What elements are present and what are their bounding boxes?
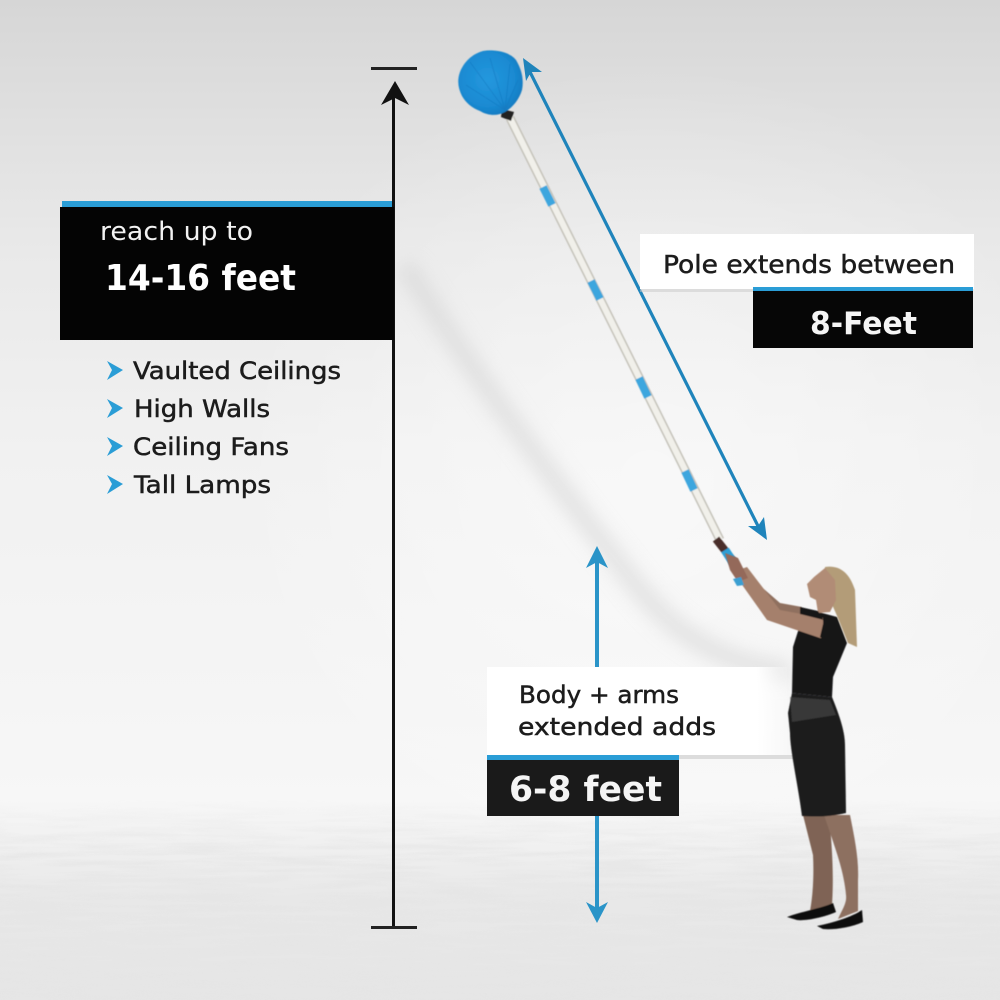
- front leg: [824, 815, 858, 919]
- text: extended adds: extended adds: [518, 713, 716, 741]
- hair: [824, 567, 857, 647]
- pole with duster head: [458, 50, 734, 564]
- back leg: [803, 815, 833, 911]
- figure: woman holding pole: [725, 553, 863, 929]
- pole handle: [716, 539, 734, 562]
- skirt: [788, 693, 846, 817]
- head: [807, 568, 836, 613]
- text: 8-Feet: 8-Feet: [810, 306, 917, 342]
- text: Tall Lamps: Tall Lamps: [133, 471, 271, 499]
- height measure line: black arrow with end caps: [371, 67, 417, 929]
- rear arm: [745, 570, 802, 618]
- text: Vaulted Ceilings: Vaulted Ceilings: [133, 357, 341, 385]
- icon: bullet 2: [107, 399, 123, 418]
- panel: reach up to 14-16 feet: [60, 201, 394, 340]
- hand: [725, 553, 748, 582]
- panel: body + arms: [487, 667, 794, 816]
- arrow: pole length: [523, 58, 767, 540]
- torso: [792, 607, 847, 697]
- text: reach up to: reach up to: [100, 217, 253, 247]
- icon: bullet 3: [107, 437, 123, 456]
- shoes: [787, 903, 836, 920]
- pole blue clips: [543, 187, 694, 490]
- text: Body + arms: Body + arms: [519, 681, 679, 709]
- text: High Walls: High Walls: [134, 395, 270, 423]
- front arm: [733, 567, 824, 638]
- panel: pole extends: [640, 234, 974, 348]
- text: Ceiling Fans: Ceiling Fans: [133, 433, 289, 461]
- text: 14-16 feet: 14-16 feet: [105, 258, 296, 299]
- pole shaft: [510, 118, 720, 540]
- text: Pole extends between: Pole extends between: [663, 250, 955, 279]
- icon: bullet 4: [107, 475, 123, 494]
- sleeve: [800, 607, 826, 640]
- text: 6-8 feet: 6-8 feet: [509, 770, 662, 810]
- arrow: body height: [586, 546, 608, 923]
- icon: duster head: [501, 109, 514, 121]
- icon: bullet 1: [107, 361, 123, 380]
- list: uses: [107, 357, 341, 499]
